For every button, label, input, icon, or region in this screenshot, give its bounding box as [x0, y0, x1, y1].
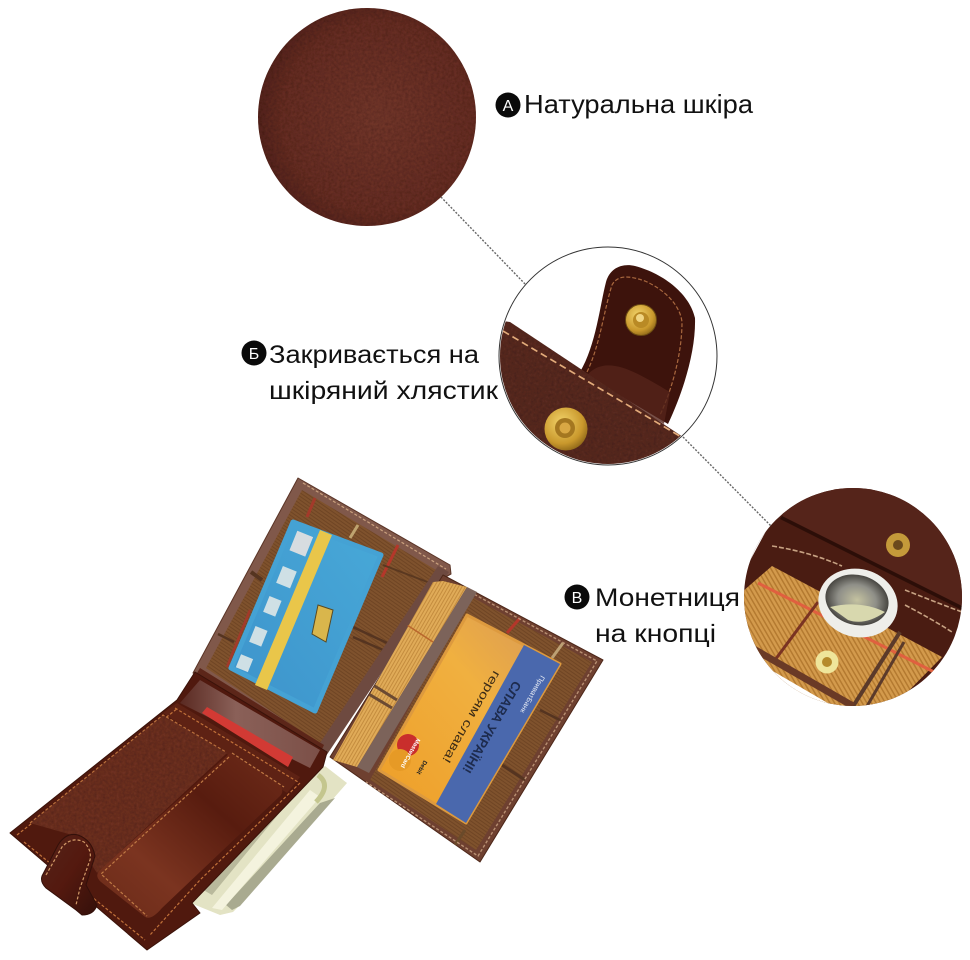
- fold area: [180, 680, 320, 768]
- flap snap: [886, 533, 910, 557]
- lower leather panel: [500, 321, 681, 464]
- wallet photo: [10, 478, 603, 950]
- stitching: [503, 331, 683, 438]
- leather body: [30, 715, 227, 873]
- slot strip: [163, 703, 300, 793]
- orange card: MasterCard: [399, 737, 420, 769]
- pocket stitching: [101, 753, 284, 916]
- top flap: [782, 488, 962, 607]
- stitching in pocket: [772, 546, 962, 632]
- label В: coin pocket with snap: Монетниця: [595, 584, 740, 612]
- wallet: lower flap base: [10, 672, 327, 950]
- label Б: closes with leather strap: шкіряний хлястик: [269, 377, 499, 405]
- flap stitching: [17, 708, 300, 940]
- slot stitching: [175, 708, 298, 782]
- lining hem: [756, 646, 854, 706]
- circle: coin pocket detail: [744, 488, 962, 706]
- label Б: closes with leather strap: [242, 340, 499, 405]
- banknotes: [188, 766, 347, 915]
- orange card: Debit: [415, 759, 427, 775]
- circle: leather strap detail: [498, 246, 718, 466]
- tartan lining: [744, 566, 942, 706]
- lower snap: [544, 408, 588, 450]
- fold binding: [314, 566, 449, 759]
- circle: leather texture: [258, 8, 476, 226]
- strap tab: [580, 265, 695, 424]
- beige pocket: [333, 581, 467, 767]
- pocket flap: [97, 753, 282, 918]
- orange card: ПриватБанк: [518, 674, 545, 715]
- left panel stitching: [303, 483, 446, 569]
- wallet: right panel: [330, 575, 603, 862]
- lower binding: [194, 668, 324, 757]
- airtag disc: [818, 568, 898, 638]
- label В: coin pocket with snap: [564, 584, 740, 648]
- white gap at upper left: [750, 532, 766, 560]
- orange card: героям слава!: [439, 668, 504, 766]
- red card in slot: [202, 707, 293, 767]
- label A: natural leather: Натуральна шкіра: [524, 89, 754, 119]
- orange card: [379, 615, 560, 823]
- dotted connector: strap to coin pocket: [683, 437, 771, 526]
- wallet: left upper panel: [193, 478, 451, 759]
- closure strap: [42, 834, 97, 915]
- dotted connector: leather to strap: [441, 197, 526, 285]
- blue card: [231, 522, 381, 711]
- orange card: СЛАВА УКРАЇНІ!: [459, 678, 524, 776]
- label В: coin pocket with snap: на кнопці: [595, 620, 716, 648]
- strap snap: [626, 304, 656, 336]
- label В: coin pocket with snap: В: [572, 590, 582, 607]
- right panel stitching: [366, 592, 597, 856]
- body stitching: [30, 715, 226, 823]
- label A: natural leather: A: [503, 98, 514, 115]
- lower snap: [816, 650, 838, 674]
- label Б: closes with leather strap: Б: [249, 346, 259, 363]
- label Б: closes with leather strap: Закривається на: [269, 341, 479, 369]
- grey leather strip: [357, 587, 477, 773]
